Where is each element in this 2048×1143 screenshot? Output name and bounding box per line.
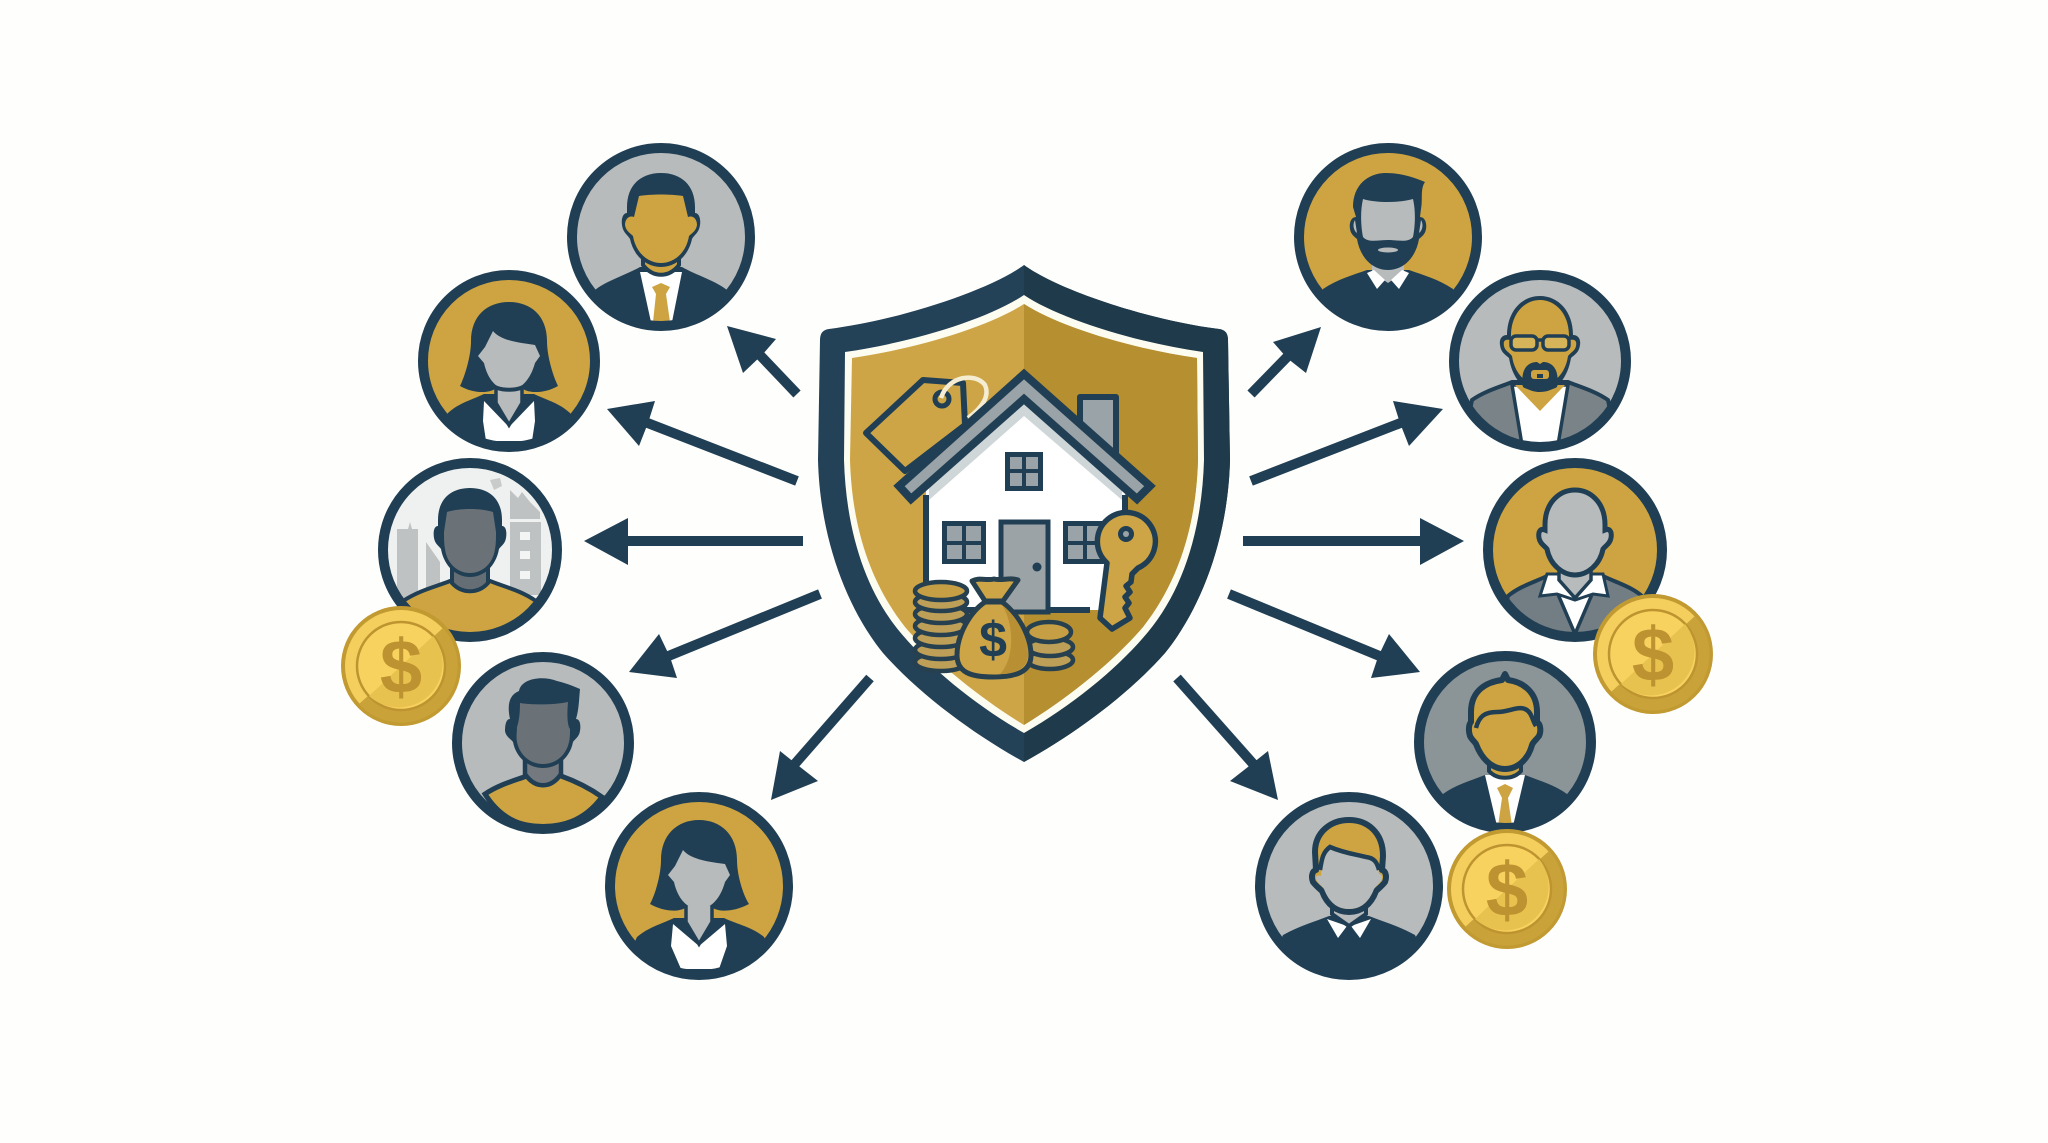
icon: key hole	[1118, 526, 1134, 542]
house: roof	[899, 374, 1150, 499]
icon: money bag: $	[979, 612, 1007, 668]
person: bottom-left woman on gold	[610, 797, 788, 986]
icon: dollar coin, left: $	[380, 625, 422, 710]
backdrop: city buildings	[397, 478, 541, 600]
icon: dollar coin, lower right: $	[1486, 848, 1528, 933]
arrow: to fourth right person	[1229, 594, 1420, 678]
person: second left woman on gold	[423, 275, 595, 461]
icon: right coin stack	[1027, 622, 1073, 669]
arrow: to third left person	[584, 518, 803, 565]
person: fourth right blond man in suit	[1419, 656, 1591, 842]
house: door	[1001, 522, 1048, 612]
arrow: to second right person	[1251, 401, 1443, 481]
infographic: protected home connected to ten people	[341, 143, 1713, 980]
house: left window	[942, 521, 986, 564]
arrow: to fourth left person	[629, 594, 820, 678]
arrow: to third right person	[1243, 518, 1464, 565]
shield: central emblem with house	[818, 265, 1230, 762]
person: second right bald man with glasses	[1454, 275, 1626, 461]
icon: left coin stack	[915, 582, 967, 671]
shield: cream inner edge	[844, 295, 1204, 733]
person: bottom-right blond man with grey face	[1259, 797, 1439, 986]
arrow: to top-left person	[727, 326, 797, 394]
icon: dollar coin, left	[341, 606, 461, 726]
house: walls	[926, 396, 1125, 610]
arrow: to top-right person	[1251, 327, 1321, 394]
person: fourth left man in gold shirt	[457, 657, 629, 829]
icon: dollar coin, upper right	[1593, 594, 1713, 714]
shield: gold field	[850, 304, 1198, 725]
arrow: to bottom-right person	[1177, 678, 1278, 800]
person: third left man with city backdrop	[383, 463, 557, 650]
icon: dollar coin, upper right: $	[1632, 613, 1674, 698]
icon: house	[899, 374, 1150, 612]
person: top-left man in suit on grey	[571, 148, 751, 337]
icon: key	[1097, 512, 1155, 629]
person: third right man on gold	[1488, 463, 1662, 650]
house: right window	[1063, 521, 1107, 564]
house: attic window	[1005, 452, 1043, 491]
house: chimney	[1080, 397, 1116, 462]
arrow: to second left person	[607, 401, 797, 481]
icon: money bag	[957, 579, 1031, 677]
house: shadow under roof	[929, 400, 1122, 500]
shield: navy outer frame	[818, 265, 1230, 762]
arrow: to bottom-left person	[771, 678, 870, 800]
person: top-right bearded man on gold	[1298, 148, 1478, 337]
icon: price tag	[866, 378, 986, 471]
icon: dollar coin, lower right	[1447, 829, 1567, 949]
arrows: from the shield to each person	[584, 326, 1464, 800]
